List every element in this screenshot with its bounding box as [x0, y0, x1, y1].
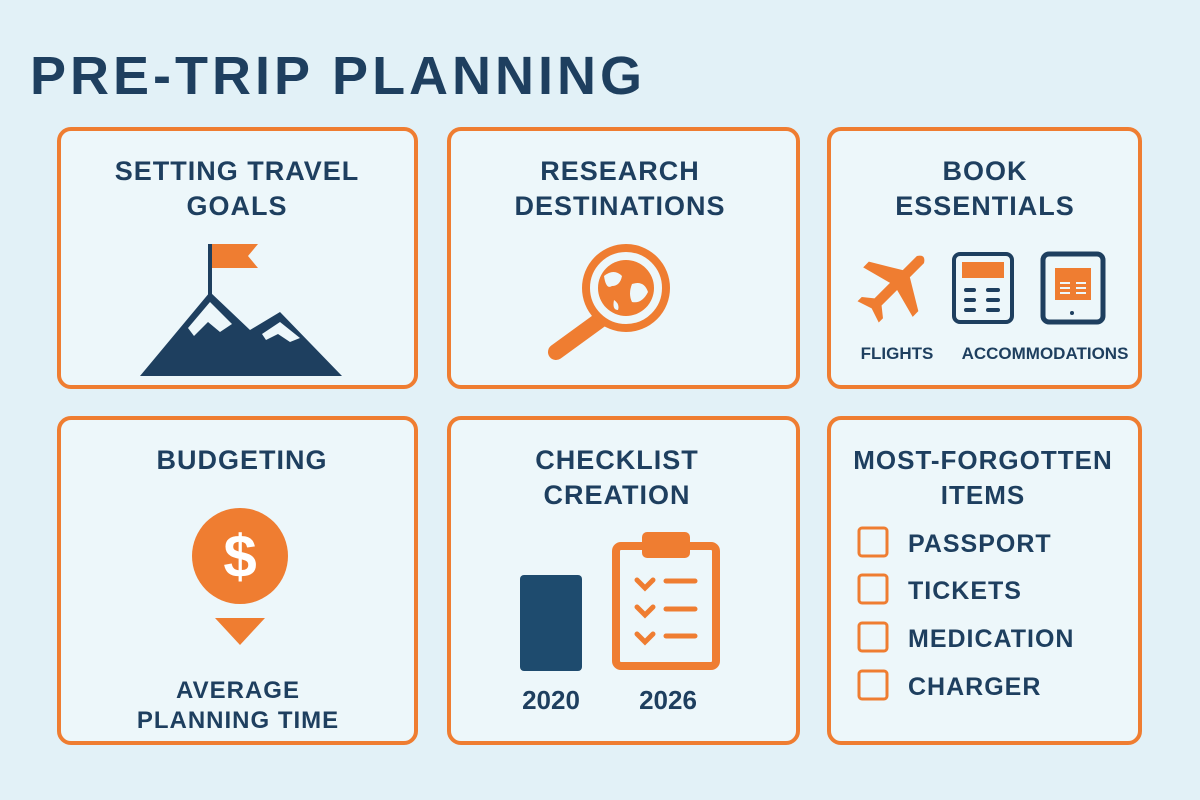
- heading: setting travel goals: SETTING TRAVEL: [115, 156, 359, 186]
- panel: research destinations: [449, 129, 798, 387]
- bar: 2020: [520, 575, 582, 671]
- label: flights: FLIGHTS: [861, 344, 933, 363]
- icon: down arrow: [215, 618, 265, 645]
- heading: research destinations: DESTINATIONS: [514, 191, 726, 221]
- heading: setting travel goals: GOALS: [186, 191, 288, 221]
- checklist items: TICKETS: [908, 577, 1022, 605]
- heading: most-forgotten items: ITEMS: [941, 480, 1025, 510]
- checklist items: MEDICATION: [908, 625, 1074, 653]
- heading: book essentials: BOOK: [942, 156, 1028, 186]
- panel: setting travel goals: [59, 129, 416, 387]
- icon: calculator: [954, 254, 1012, 322]
- heading: budgeting: BUDGETING: [156, 445, 328, 475]
- checklist items: CHARGER: [908, 673, 1041, 701]
- icon: dollar coin: $: [223, 523, 257, 590]
- icon: magnifier globe: [556, 248, 666, 352]
- checklist items: [859, 528, 1074, 701]
- panel: budgeting: [59, 418, 416, 743]
- label: 2020: 2020: [522, 685, 580, 715]
- label: accommodations: ACCOMMODATIONS: [962, 344, 1128, 363]
- heading: checklist creation: CREATION: [544, 480, 690, 510]
- text: average planning time: PLANNING TIME: [137, 707, 339, 734]
- icon: tablet: [1043, 254, 1103, 322]
- text: average planning time: AVERAGE: [176, 677, 300, 704]
- heading: book essentials: ESSENTIALS: [895, 191, 1075, 221]
- panel: book essentials: [829, 129, 1140, 387]
- icon: plane: [843, 232, 948, 337]
- heading: research destinations: RESEARCH: [540, 156, 700, 186]
- panel: most-forgotten items: [829, 418, 1140, 743]
- icon: dollar coin: [192, 508, 288, 604]
- label: 2026: 2026: [639, 685, 697, 715]
- heading: checklist creation: CHECKLIST: [535, 445, 699, 475]
- panel: checklist creation: [449, 418, 798, 743]
- icon: clipboard: [616, 532, 716, 666]
- checklist items: PASSPORT: [908, 530, 1052, 558]
- icon: mountain with flag: [140, 244, 342, 376]
- heading: most-forgotten items: MOST-FORGOTTEN: [853, 445, 1113, 475]
- title: PRE-TRIP PLANNING: [30, 46, 646, 106]
